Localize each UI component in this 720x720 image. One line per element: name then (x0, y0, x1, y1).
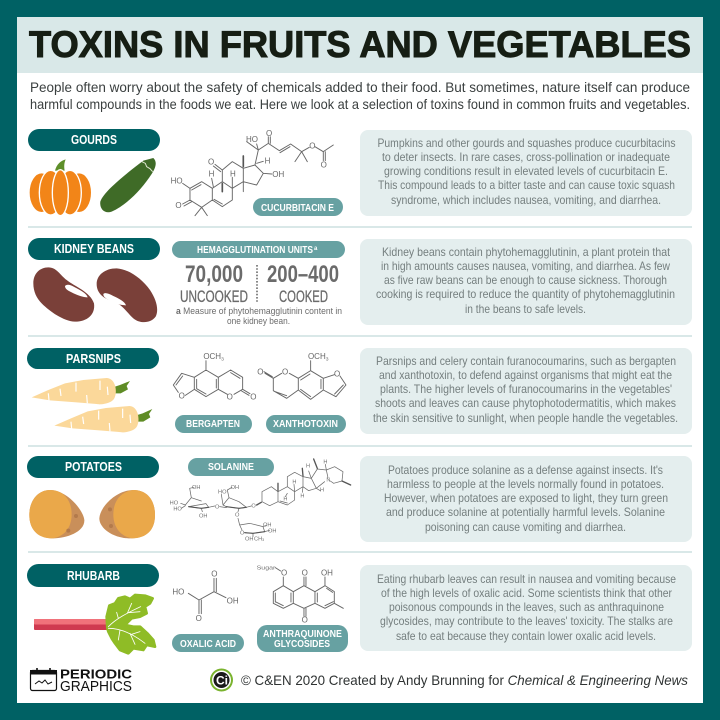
label: anthraquinone glycosides (257, 625, 348, 652)
chemical structure: solanine: OH (192, 485, 200, 491)
chemical structure: oxalic acid (172, 570, 239, 623)
chemical structure: cucurbitacin E: O (309, 141, 316, 150)
chemical structure: anthraquinone glycosides: OH (321, 569, 333, 578)
text block: rhubarb: glycosides, may contribute to the leaves' toxicity. The stalks are (380, 615, 673, 628)
chemical structure: cucurbitacin E: HO (246, 135, 258, 144)
panel: gourds (28, 129, 692, 216)
text block: parsnips: and xanthotoxin, to defend against organisms that might eat the (379, 369, 672, 382)
chemical structure: oxalic acid: HO (172, 588, 184, 597)
text block: kidney beans: in high amounts causes nausea, vomiting, and diarrhea. As few (381, 260, 671, 273)
chemical structure: cucurbitacin E: H (265, 157, 271, 166)
chemical structure: oxalic acid: O (211, 570, 218, 579)
label: hemagglutination units: a (314, 246, 318, 252)
label: solanine: SOLANINE (208, 461, 254, 473)
heading: rhubarb: RHUBARB (67, 569, 120, 583)
chemical structure: cucurbitacin E: OH (272, 170, 285, 179)
stat: cooked: COOKED (279, 288, 328, 306)
text block: rhubarb: safe to eat because they contain lower oxalic acid levels. (396, 630, 656, 643)
chemical structure: solanine: H (306, 464, 310, 470)
chemical structure: bergapten: O (179, 392, 185, 401)
stat: cooked: 200–400 (267, 261, 339, 288)
chemical structure: cucurbitacin E: H (209, 170, 215, 179)
chemical structure: solanine: H (323, 459, 327, 465)
label: anthraquinone glycosides: ANTHRAQUINONE (263, 628, 342, 640)
label: oxalic acid (172, 634, 244, 652)
chemical structure: cucurbitacin E: H (230, 170, 236, 179)
chemical structure: anthraquinone glycosides: O (302, 569, 308, 578)
label: anthraquinone glycosides: GLYCOSIDES (274, 638, 330, 650)
text block: gourds: to deter insects. In rare cases, cross-pollination or inadequate (382, 151, 670, 164)
logo: C&EN ci (210, 668, 233, 692)
label: cucurbitacin E: CUCURBITACIN E (261, 202, 334, 214)
chemical structure: solanine: OH (231, 485, 239, 491)
panel: potatoes (27, 456, 692, 542)
heading: rhubarb (27, 564, 159, 587)
text block: gourds (360, 130, 692, 216)
chemical structure: cucurbitacin E: O (175, 201, 182, 210)
heading: gourds: GOURDS (71, 133, 117, 147)
icon: kidney beans (33, 267, 157, 322)
panel: rhubarb (27, 564, 692, 653)
panel: parsnips (27, 348, 692, 434)
text block: potatoes: poisoning can cause vomiting and diarrhea. (425, 521, 626, 534)
chemical structure: xanthotoxin: OCH (308, 352, 326, 361)
heading: kidney beans (28, 238, 160, 260)
chemical structure: bergapten: OCH (203, 352, 221, 361)
text block: kidney beans (360, 239, 692, 325)
chemical structure: solanine: CH (254, 536, 262, 542)
text block: potatoes: However, when potatoes are exposed to light, they turn green (384, 492, 668, 505)
chemical structure: cucurbitacin E: O (266, 129, 272, 138)
logo: periodic graphics: PERIODIC (60, 668, 132, 682)
icon: potatoes (29, 490, 155, 538)
icon: rhubarb (34, 595, 155, 653)
text block: parsnips: the skin sensitive to sunlight, when people handle the vegetables. (373, 412, 678, 425)
icon: pumpkin (29, 159, 92, 216)
heading: potatoes (27, 456, 159, 478)
intro text: harmful compounds in the foods we eat. Here we look at a selection of toxins found in common fruits and vegetables. (30, 97, 690, 112)
chemical structure: cucurbitacin E: O (208, 158, 214, 167)
heading: gourds (28, 129, 160, 151)
logo: C&EN ci: Ci (216, 674, 228, 688)
label: oxalic acid: OXALIC ACID (180, 638, 236, 650)
label: xanthotoxin: XANTHOTOXIN (273, 418, 338, 430)
chemical structure: solanine: 3 (262, 538, 264, 542)
footnote (176, 306, 342, 327)
chemical structure: anthraquinone glycosides (257, 566, 343, 624)
chemical structure: bergapten (173, 352, 257, 402)
icon: parsnips (32, 378, 152, 432)
stat: cooked (267, 261, 339, 306)
chemical structure: cucurbitacin E: O (321, 161, 327, 170)
text block: potatoes: harmless to people at the levels normally found in potatoes. (387, 478, 664, 491)
text block: kidney beans: Kidney beans contain phytohemagglutinin, a plant protein that (382, 246, 671, 259)
chemical structure: anthraquinone glycosides: O (281, 569, 287, 578)
chemical structure: cucurbitacin E (171, 129, 333, 216)
chemical structure: solanine: HO (218, 489, 227, 495)
credit line: © C&EN 2020 Created by Andy Brunning for Chemical & Engineering News (241, 673, 688, 688)
chemical structure: bergapten: 3 (221, 356, 224, 362)
chemical structure: solanine: OH (199, 513, 207, 519)
stat: uncooked (180, 261, 248, 306)
chemical structure: xanthotoxin: O (334, 369, 340, 378)
chemical structure: bergapten: O (250, 393, 257, 402)
chemical structure: anthraquinone glycosides: O (302, 615, 308, 624)
stat: uncooked: UNCOOKED (180, 288, 248, 306)
chemical structure: solanine: H (283, 496, 287, 502)
text block: potatoes: and produce solanine at potentially harmful levels. Solanine (386, 506, 665, 519)
heading: potatoes: POTATOES (65, 460, 122, 474)
text block: kidney beans: cooking is required to reduce the quantity of phytohemagglutinin (376, 288, 675, 301)
intro text: People often worry about the safety of chemicals added to their food. But sometimes, nature itself can produce (30, 80, 690, 95)
chemical structure: solanine: H (320, 488, 324, 494)
label: bergapten: BERGAPTEN (186, 418, 240, 430)
chemical structure: xanthotoxin: O (282, 367, 288, 376)
logo: periodic graphics: GRAPHICS (60, 679, 132, 695)
logo: periodic graphics (30, 668, 132, 695)
label: hemagglutination units (172, 241, 345, 258)
chemical structure: bergapten: O (227, 393, 233, 402)
text block: rhubarb: Eating rhubarb leaves can result in nausea and vomiting because (377, 573, 676, 586)
chemical structure: solanine: N (326, 477, 330, 483)
text block: potatoes (360, 456, 692, 542)
text block: parsnips: shoots and leaves can cause phytophotodermatitis, which makes (375, 397, 676, 410)
chemical structure: solanine: H (300, 494, 304, 500)
text block: rhubarb: of the high levels of oxalic acid. Some scientists think that other (381, 587, 672, 600)
chemical structure: solanine: O (215, 504, 220, 510)
intro text (30, 80, 690, 112)
chemical structure: oxalic acid: O (196, 614, 202, 623)
chemical structure: solanine: HO (170, 501, 179, 507)
title: TOXINS IN FRUITS AND VEGETABLES (29, 24, 691, 65)
footnote: a Measure of phytohemagglutinin content in (176, 306, 342, 317)
heading: parsnips (27, 348, 159, 369)
chemical structure: solanine: OH (245, 536, 253, 542)
label: xanthotoxin (266, 415, 346, 433)
chemical structure: xanthotoxin: 3 (326, 356, 329, 362)
panel: kidney beans (28, 238, 692, 327)
text block: rhubarb (360, 565, 692, 651)
chemical structure: solanine: OH (263, 522, 271, 528)
text block: potatoes: Potatoes produce solanine as a defense against insects. It's (388, 464, 663, 477)
text block: parsnips: plants. The higher levels of furanocoumarins in the vegetables' (380, 383, 672, 396)
footnote: one kidney bean. (227, 316, 290, 327)
chemical structure: cucurbitacin E: HO (171, 176, 183, 185)
text block: parsnips (360, 348, 692, 434)
label: solanine (188, 458, 274, 476)
text block: gourds: growing conditions result in elevated levels of cucurbitacin E. (384, 165, 668, 178)
text block: parsnips: Parsnips and celery contain furanocoumarins, such as bergapten (376, 355, 676, 368)
chemical structure: solanine: HO (173, 507, 182, 513)
label: cucurbitacin E (253, 198, 343, 216)
label: bergapten (175, 415, 252, 433)
chemical structure: solanine: OH (268, 529, 276, 535)
chemical structure: xanthotoxin: O (257, 367, 264, 376)
text block: gourds: Pumpkins and other gourds and squashes produce cucurbitacins (378, 137, 676, 150)
heading: parsnips: PARSNIPS (66, 352, 121, 366)
text block: kidney beans: in the beans to safe levels. (465, 303, 586, 316)
chemical structure: solanine: O (251, 504, 256, 510)
chemical structure: oxalic acid: OH (227, 597, 239, 606)
chemical structure: solanine: H (292, 480, 296, 486)
chemical structure: solanine: O (240, 530, 245, 536)
chemical structure: solanine: O (235, 513, 240, 519)
chemical structure: solanine (170, 459, 351, 542)
text block: kidney beans: as five raw beans can be enough to cause sickness. Thorough (384, 274, 667, 287)
heading: kidney beans: KIDNEY BEANS (54, 242, 134, 256)
text block: gourds: This compound leads to a bitter taste and can cause toxic squash (378, 179, 675, 192)
text block: gourds: syndrome, which includes nausea, vomiting, and diarrhea. (391, 194, 661, 207)
label: hemagglutination units: HEMAGGLUTINATION UNITS (197, 244, 313, 256)
chemical structure: xanthotoxin (257, 352, 346, 399)
icon: zucchini (100, 158, 156, 212)
chemical structure: anthraquinone glycosides: Sugar (257, 566, 275, 572)
text block: rhubarb: poisonous compounds in the leaves, such as anthraquinone (389, 601, 664, 614)
stat: uncooked: 70,000 (185, 261, 243, 288)
